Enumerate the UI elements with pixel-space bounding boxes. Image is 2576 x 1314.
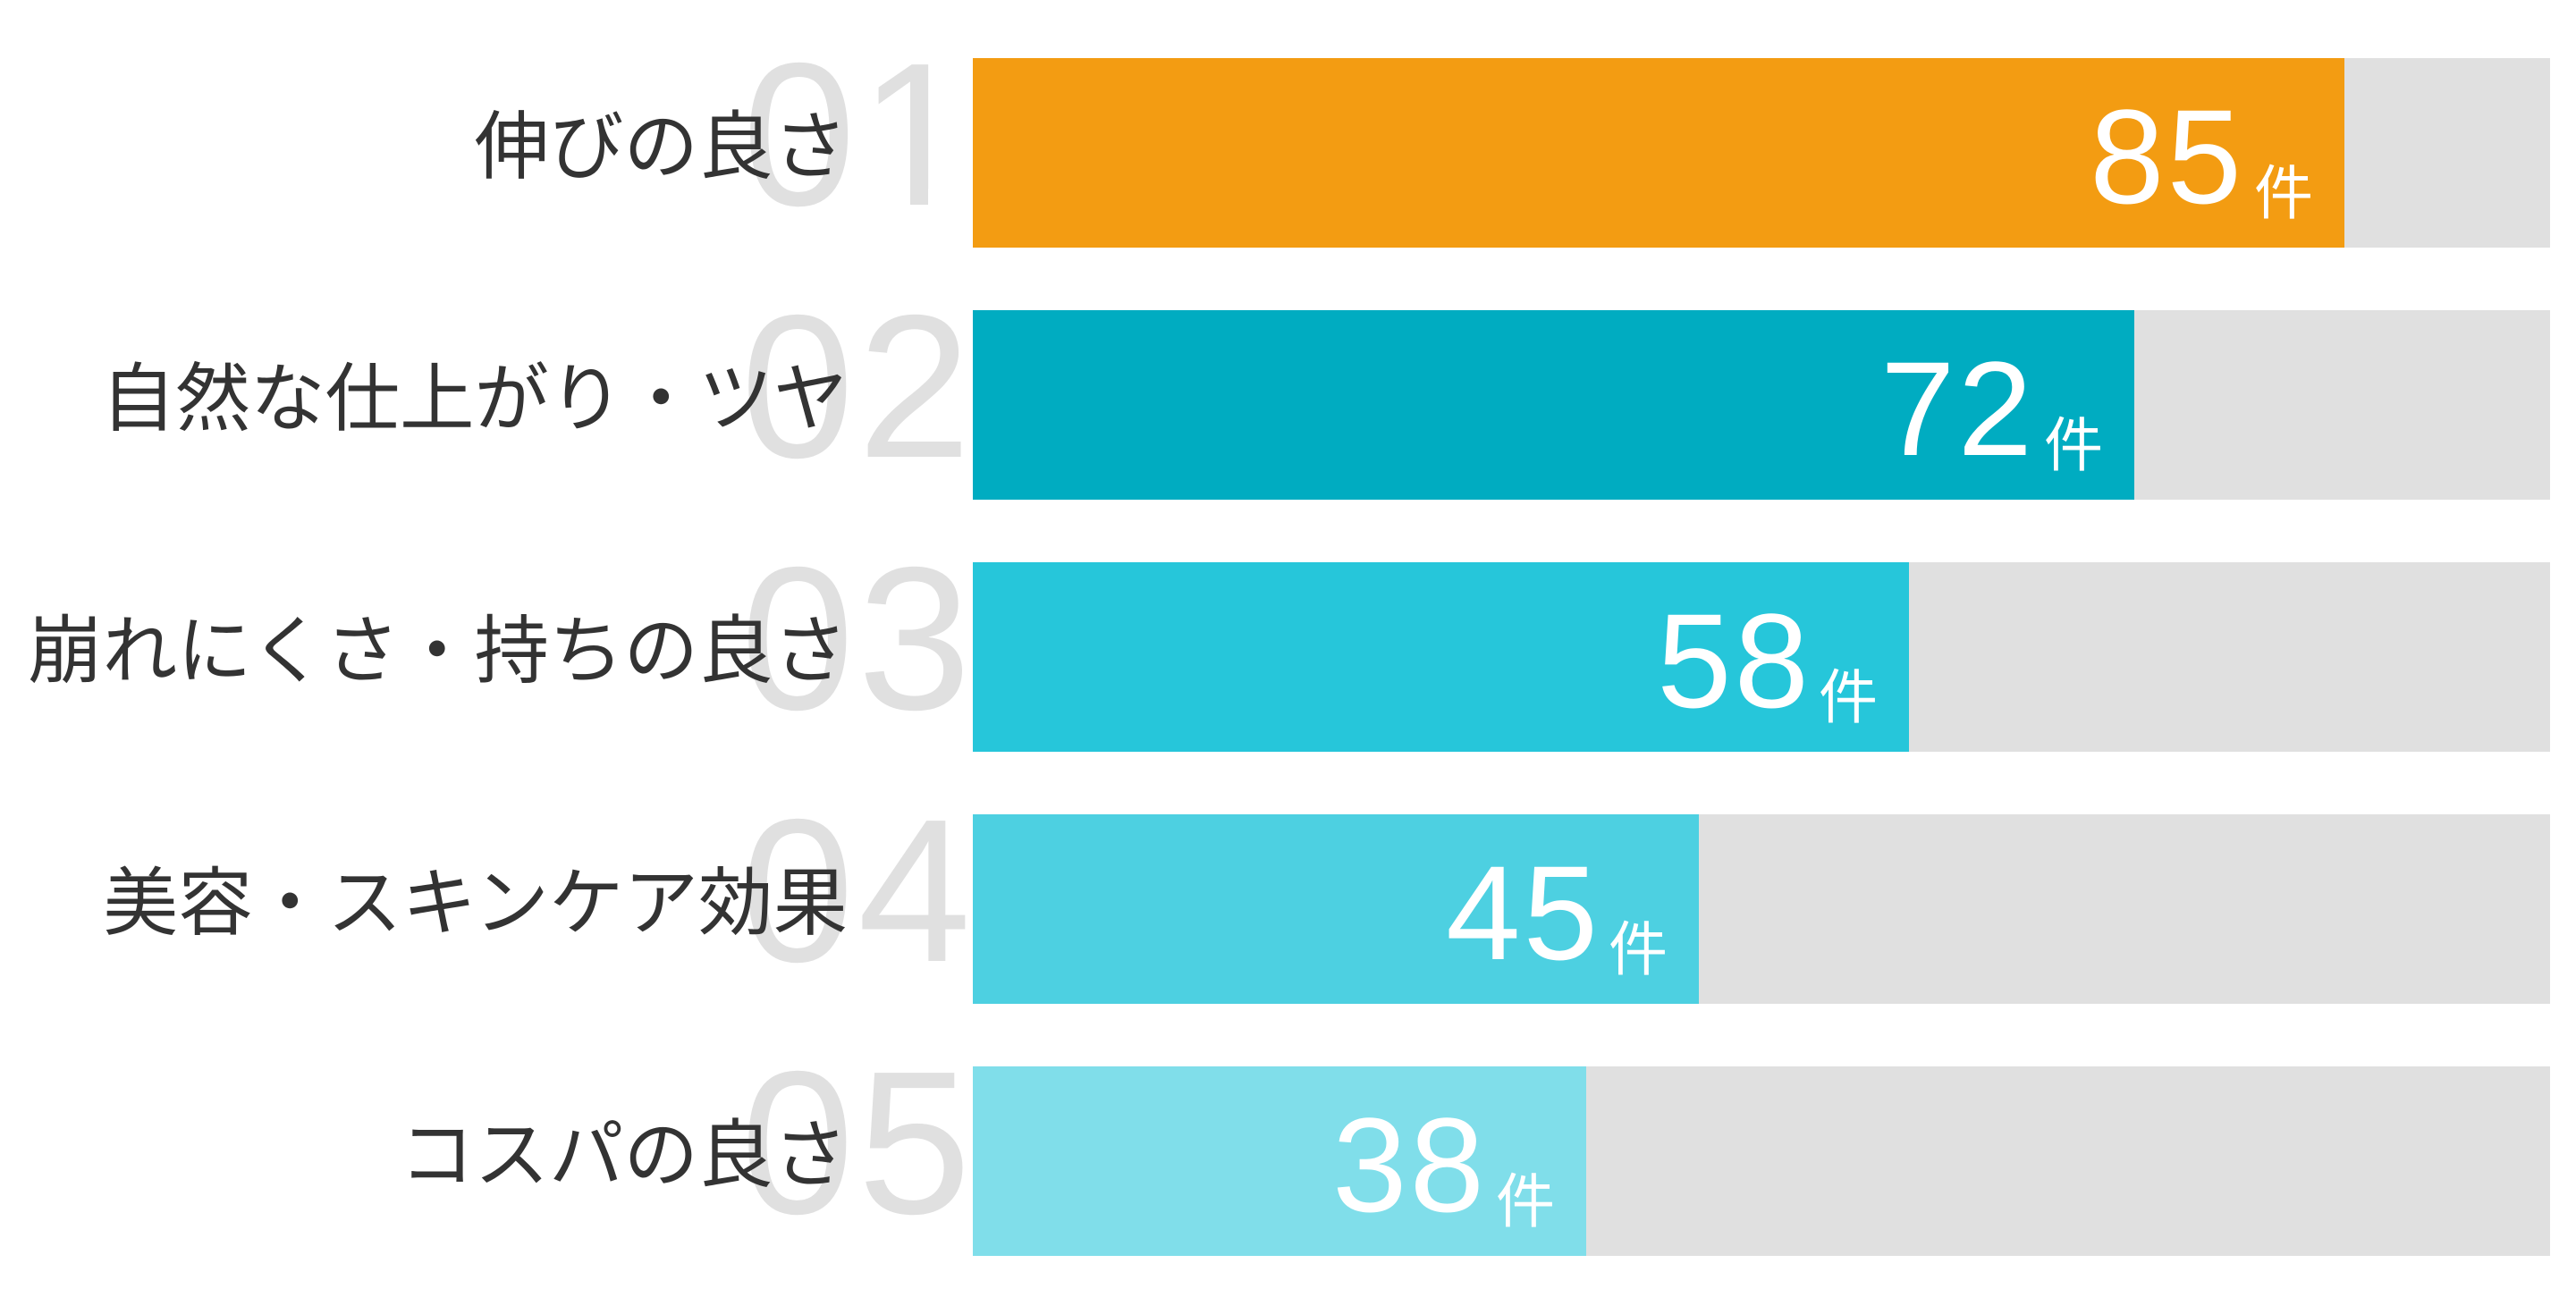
row 02: 自然な仕上がり・ツヤ <box>101 274 2550 501</box>
unit 件: 件 <box>1496 1168 1555 1234</box>
row 01: 伸びの良さ <box>474 21 2550 248</box>
value 38: 38 <box>1332 1090 1487 1240</box>
label 04: 美容・スキンケア効果 <box>104 861 848 945</box>
bar 02 <box>973 310 2134 500</box>
value 72: 72 <box>1880 333 2035 484</box>
unit 件: 件 <box>1609 916 1668 982</box>
row 03: 崩れにくさ・持ちの良さ <box>28 526 2550 753</box>
track 04 <box>973 814 2550 1004</box>
bar 03 <box>973 562 1909 752</box>
label 02: 自然な仕上がり・ツヤ <box>101 357 848 441</box>
rank 01 <box>742 21 976 248</box>
rank 04: 04 <box>740 778 975 1005</box>
unit 件: 件 <box>1819 664 1878 730</box>
value 45: 45 <box>1446 838 1600 988</box>
value 58: 58 <box>1657 585 1812 736</box>
label 03: 崩れにくさ・持ちの良さ <box>28 609 848 693</box>
rank 05: 05 <box>740 1030 975 1257</box>
rank 01: 1 <box>859 21 976 248</box>
track 05 <box>973 1066 2550 1256</box>
track 01 <box>973 58 2550 248</box>
track 03 <box>973 562 2550 752</box>
row 05: コスパの良さ <box>400 1030 2550 1257</box>
row 04: 美容・スキンケア効果 <box>104 778 2550 1005</box>
rank 02: 02 <box>740 274 975 501</box>
unit 件: 件 <box>2254 160 2313 226</box>
bar 04 <box>973 814 1699 1004</box>
rank 03: 03 <box>740 526 975 753</box>
label 05: コスパの良さ <box>400 1113 848 1197</box>
bar 01 <box>973 58 2344 248</box>
track 02 <box>973 310 2550 500</box>
value 85: 85 <box>2090 81 2244 232</box>
bar 05 <box>973 1066 1586 1256</box>
unit 件: 件 <box>2044 412 2103 478</box>
label 01: 伸びの良さ <box>474 105 848 189</box>
rank 01: 0 <box>742 21 859 248</box>
